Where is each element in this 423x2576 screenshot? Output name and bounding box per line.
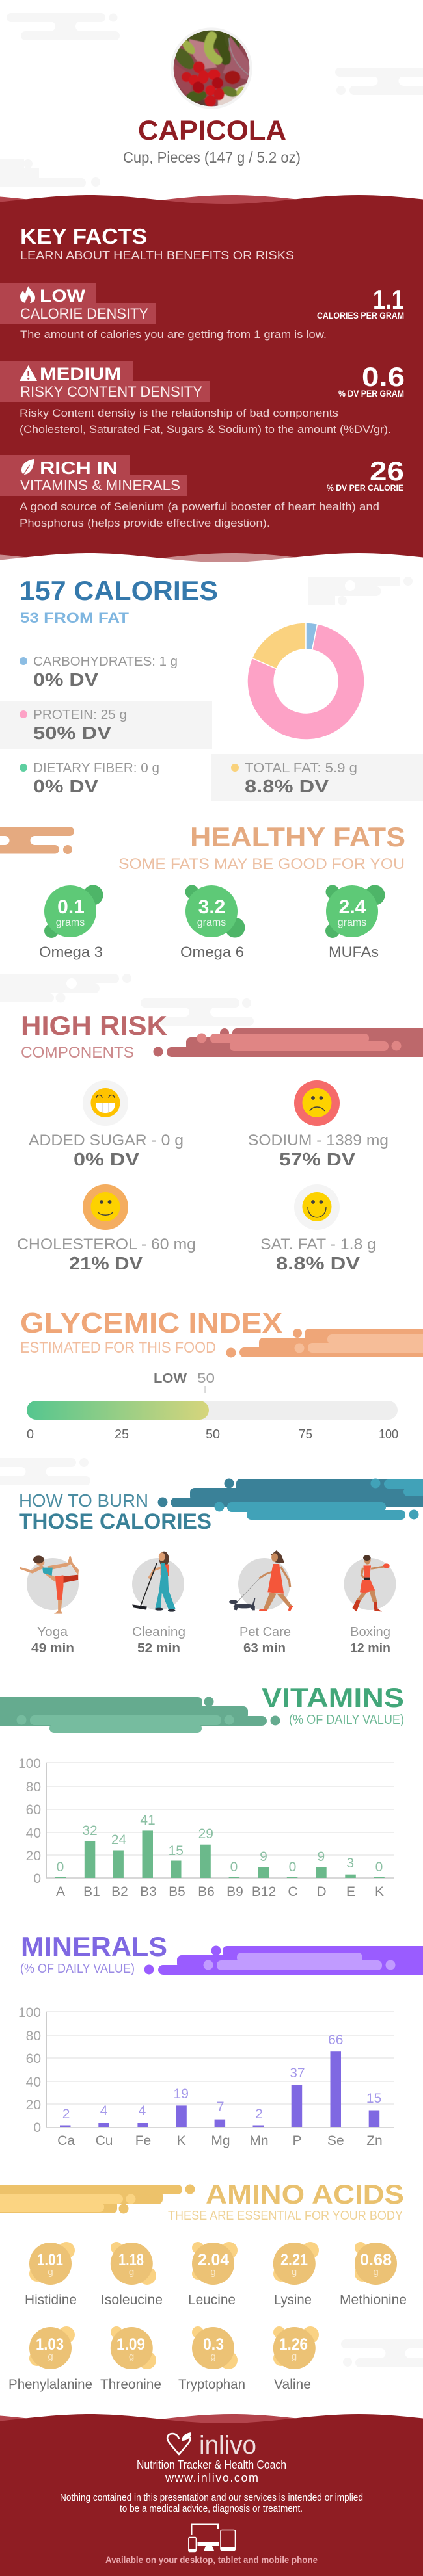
amino: histidine: Histidine xyxy=(25,2293,77,2308)
bar chart: minerals: Mg xyxy=(211,2133,230,2148)
amino: valine: Valine xyxy=(274,2377,311,2392)
activity: cleaning: 52 min xyxy=(137,1641,180,1656)
amino: valine: g xyxy=(292,2351,297,2362)
key facts subheading: LEARN ABOUT HEALTH BENEFITS OR RISKS xyxy=(20,249,294,262)
bar chart: minerals: 66 xyxy=(328,2033,343,2048)
amino: phenylalanine: 1.03 xyxy=(36,2335,64,2354)
icon: warning triangle xyxy=(20,365,37,381)
fat: omega 3: Omega 3 xyxy=(39,944,103,960)
disclaimer: Nothing contained in this presentation and our services is intended or implied xyxy=(60,2493,363,2503)
amino: lysine: Lysine xyxy=(274,2293,312,2308)
title: CAPICOLA xyxy=(138,115,286,146)
macro: carbohydrates: 0% DV xyxy=(33,670,98,690)
bar chart: minerals: Fe xyxy=(135,2133,151,2148)
amino: histidine xyxy=(25,2242,77,2308)
amino: tryptophan xyxy=(178,2326,245,2392)
fact: calorie density: The amount of calories you are getting from 1 gram is low. xyxy=(20,328,327,341)
risk: sodium: SODIUM - 1389 mg xyxy=(248,1132,389,1149)
amino: tryptophan: 0.3 xyxy=(203,2335,224,2354)
amino: leucine: 2.04 xyxy=(198,2251,229,2269)
macro: dietary fiber: 0% DV xyxy=(33,776,98,796)
amino: lysine: 2.21 xyxy=(280,2251,308,2269)
bar chart: vitamins: 20 xyxy=(26,1849,41,1864)
bar chart: minerals: Cu xyxy=(96,2133,113,2148)
activity: pet care: 63 min xyxy=(243,1641,286,1656)
icon: cleaning figure xyxy=(132,1552,175,1612)
fact: rich in vitamins and minerals: A good source of Selenium (a powerful booster of heart health) and xyxy=(20,501,379,513)
glycemic gauge xyxy=(27,1372,398,1442)
activity: cleaning: Cleaning xyxy=(132,1625,185,1639)
healthy fats heading: HEALTHY FATS xyxy=(190,822,405,852)
fact: risky content density: RISKY CONTENT DENSITY xyxy=(20,384,202,400)
bar chart: vitamins: 24 xyxy=(111,1832,126,1847)
fact: rich in vitamins and minerals xyxy=(0,455,404,529)
fat: MUFAs xyxy=(325,885,385,960)
bar chart: vitamins: E xyxy=(346,1884,355,1899)
high risk heading: HIGH RISK xyxy=(21,1010,167,1041)
decorative band: minerals xyxy=(144,1946,423,1975)
bar chart: minerals: P xyxy=(292,2133,302,2148)
bar chart: minerals xyxy=(18,2005,394,2148)
glycemic gauge: 50 xyxy=(206,1427,220,1442)
macro: total fat: 8.8% DV xyxy=(245,776,329,796)
bar chart: vitamins xyxy=(18,1756,394,1899)
activity: yoga xyxy=(20,1555,79,1656)
bar chart: vitamins: 40 xyxy=(26,1826,41,1841)
burn heading line one: HOW TO BURN xyxy=(19,1490,148,1511)
fact: calorie density: CALORIE DENSITY xyxy=(20,306,148,322)
icon: grinning face xyxy=(91,1088,120,1117)
bar chart: vitamins: 60 xyxy=(26,1802,41,1817)
icon: yoga figure xyxy=(20,1555,79,1614)
amino: threonine xyxy=(100,2326,161,2392)
bar chart: vitamins: 3 xyxy=(346,1856,354,1871)
risk: cholesterol: CHOLESTEROL - 60 mg xyxy=(17,1236,196,1253)
key facts heading: KEY FACTS xyxy=(20,224,147,248)
macro: dietary fiber xyxy=(20,761,159,796)
calories heading: 157 CALORIES xyxy=(20,575,218,606)
amino: tryptophan: g xyxy=(210,2351,216,2362)
amino: threonine: 1.09 xyxy=(116,2335,145,2354)
glycemic index heading: GLYCEMIC INDEX xyxy=(20,1307,282,1339)
macro: carbohydrates xyxy=(20,655,178,690)
bar chart: minerals: 7 xyxy=(217,2100,225,2114)
fact: calorie density xyxy=(0,283,404,341)
disclaimer xyxy=(60,2493,363,2514)
decorative band: healthy fats xyxy=(0,827,74,854)
macro: protein xyxy=(0,701,212,749)
amino: tryptophan: Tryptophan xyxy=(178,2377,245,2392)
fat: MUFAs: MUFAs xyxy=(329,944,379,960)
brand name: inlivo xyxy=(199,2431,256,2460)
bar chart: vitamins: B9 xyxy=(226,1884,243,1899)
icon: smiling face xyxy=(91,1192,120,1221)
macro: carbohydrates: CARBOHYDRATES: 1 g xyxy=(33,655,178,669)
fat: omega 6 xyxy=(180,885,245,960)
donut chart xyxy=(247,623,364,740)
burn heading line two: THOSE CALORIES xyxy=(19,1509,212,1534)
bar chart: vitamins: 100 xyxy=(18,1756,41,1771)
bar chart: vitamins: 0 xyxy=(289,1860,296,1875)
bar chart: minerals: 37 xyxy=(290,2066,305,2081)
panel: footer xyxy=(0,2414,423,2576)
fact: risky content density: MEDIUM xyxy=(40,364,121,384)
fat: omega 3 xyxy=(39,885,103,960)
macro: protein: PROTEIN: 25 g xyxy=(33,708,127,722)
amino: methionine: g xyxy=(373,2267,379,2278)
amino: methionine: 0.68 xyxy=(360,2251,392,2269)
amino acids heading: AMINO ACIDS xyxy=(206,2179,404,2209)
bar chart: vitamins: B6 xyxy=(198,1884,215,1899)
minerals subheading: (% OF DAILY VALUE) xyxy=(20,1962,135,1976)
bar chart: minerals: Zn xyxy=(366,2133,383,2148)
bar chart: vitamins: 0 xyxy=(230,1860,238,1875)
activity: yoga: 49 min xyxy=(31,1641,74,1656)
decorative band: high risk xyxy=(154,1028,423,1057)
fact: risky content density xyxy=(0,361,405,436)
decorative band: glycemic index xyxy=(226,1329,423,1357)
healthy fats subheading: SOME FATS MAY BE GOOD FOR YOU xyxy=(118,855,405,873)
macro: protein: 50% DV xyxy=(33,723,111,743)
icon: flame xyxy=(20,286,35,303)
amino: lysine xyxy=(273,2242,319,2308)
bar chart: vitamins: 0 xyxy=(57,1860,64,1875)
risk: cholesterol: 21% DV xyxy=(69,1253,143,1273)
bar chart: minerals: 20 xyxy=(26,2098,41,2113)
activity: boxing: 12 min xyxy=(350,1641,390,1656)
vitamins subheading: (% OF DAILY VALUE) xyxy=(289,1713,404,1727)
activity: pet care xyxy=(229,1550,293,1656)
fat: MUFAs: 2.4 xyxy=(339,896,366,918)
macro: total fat: TOTAL FAT: 5.9 g xyxy=(245,761,357,775)
icon: devices xyxy=(189,2525,236,2552)
glycemic gauge: LOW xyxy=(154,1372,187,1386)
bar chart: vitamins: 80 xyxy=(26,1780,41,1795)
disclaimer: to be a medical advice, diagnosis or treatment. xyxy=(120,2504,303,2514)
bar chart: minerals: 4 xyxy=(139,2103,146,2118)
fact: rich in vitamins and minerals: VITAMINS & MINERALS xyxy=(20,477,180,493)
fat: omega 3: 0.1 xyxy=(57,896,85,918)
amino: threonine: g xyxy=(129,2351,134,2362)
glycemic index subheading: ESTIMATED FOR THIS FOOD xyxy=(20,1339,216,1357)
icon: sad face xyxy=(302,1088,332,1117)
risk: cholesterol xyxy=(17,1184,196,1273)
bar chart: vitamins: B3 xyxy=(140,1884,157,1899)
bar chart: minerals: Mn xyxy=(249,2133,269,2148)
fat: omega 6: Omega 6 xyxy=(180,944,244,960)
icon: inlivo heart logo xyxy=(167,2432,191,2454)
bar chart: vitamins: 0 xyxy=(375,1860,383,1875)
risk: sodium: 57% DV xyxy=(279,1149,355,1169)
amino: phenylalanine xyxy=(8,2326,92,2392)
activity: cleaning xyxy=(132,1552,185,1656)
bar chart: vitamins: B12 xyxy=(252,1884,276,1899)
amino acids subheading: THESE ARE ESSENTIAL FOR YOUR BODY xyxy=(168,2209,403,2223)
bar chart: minerals: 2 xyxy=(62,2107,70,2122)
bar chart: minerals: 40 xyxy=(26,2075,41,2090)
risk: added sugar: ADDED SUGAR - 0 g xyxy=(29,1132,184,1149)
bar chart: vitamins: B2 xyxy=(111,1884,128,1899)
fat: omega 3: grams xyxy=(56,917,85,928)
amino: phenylalanine: g xyxy=(48,2351,53,2362)
bar chart: minerals: 100 xyxy=(18,2005,41,2020)
calories from fat: 53 FROM FAT xyxy=(20,610,130,626)
decorative band: vitamins xyxy=(0,1697,280,1733)
fat: omega 6: grams xyxy=(197,917,226,928)
fact: risky content density: (Cholesterol, Saturated Fat, Sugars & Sodium) to the amount (%DV/gr). xyxy=(20,423,391,436)
bar chart: minerals: 15 xyxy=(366,2091,381,2106)
bar chart: vitamins: 0 xyxy=(33,1871,41,1886)
fact: calorie density: LOW xyxy=(40,286,86,306)
minerals heading: MINERALS xyxy=(21,1931,167,1962)
bar chart: vitamins: C xyxy=(288,1884,298,1899)
amino: phenylalanine: Phenylalanine xyxy=(8,2377,92,2392)
vitamins heading: VITAMINS xyxy=(262,1682,404,1713)
icon: boxing figure xyxy=(352,1555,390,1611)
fact: calorie density: 1.1 xyxy=(373,284,404,315)
bar chart: vitamins: B5 xyxy=(169,1884,185,1899)
fact: risky content density: % DV PER GRAM xyxy=(338,389,404,398)
decorative band: burn calories xyxy=(157,1478,423,1520)
risk: added sugar xyxy=(29,1080,184,1169)
bar chart: vitamins: K xyxy=(375,1884,384,1899)
bar chart: vitamins: 41 xyxy=(140,1813,156,1828)
bar chart: minerals: 0 xyxy=(33,2120,41,2135)
bar chart: vitamins: 9 xyxy=(318,1849,325,1864)
availability note: Available on your desktop, tablet and mobile phone xyxy=(105,2555,318,2565)
glycemic gauge: 50 xyxy=(197,1372,215,1386)
fact: risky content density: Risky Content density is the relationship of bad components xyxy=(20,407,338,419)
bar chart: vitamins: 9 xyxy=(260,1849,267,1864)
fact: rich in vitamins and minerals: Phosphorus (helps provide effective digestion). xyxy=(20,517,270,529)
high risk subheading: COMPONENTS xyxy=(21,1044,134,1061)
website link: www.inlivo.com xyxy=(165,2471,258,2484)
bar chart: minerals: 19 xyxy=(174,2087,189,2101)
glycemic gauge: 0 xyxy=(27,1427,34,1442)
activity: pet care: Pet Care xyxy=(239,1625,291,1639)
glycemic gauge: 75 xyxy=(299,1427,312,1442)
amino: leucine xyxy=(188,2242,238,2308)
bar chart: minerals: 4 xyxy=(100,2103,108,2118)
bar chart: vitamins: B1 xyxy=(83,1884,100,1899)
activity: boxing: Boxing xyxy=(350,1625,390,1639)
risk: saturated fat: 8.8% DV xyxy=(276,1253,360,1273)
amino: isoleucine: 1.18 xyxy=(118,2251,144,2269)
glycemic gauge: 100 xyxy=(379,1427,398,1442)
amino: histidine: g xyxy=(48,2267,53,2278)
bar chart: vitamins: 15 xyxy=(169,1843,184,1858)
amino: methionine: Methionine xyxy=(340,2293,407,2308)
amino: valine: 1.26 xyxy=(279,2335,308,2354)
bar chart: vitamins: 32 xyxy=(82,1823,98,1838)
risk: sodium xyxy=(248,1080,389,1169)
amino: leucine: Leucine xyxy=(188,2293,236,2308)
fact: risky content density: 0.6 xyxy=(362,361,405,392)
decorative band: amino acids xyxy=(0,2184,195,2214)
amino: threonine: Threonine xyxy=(100,2377,161,2392)
risk: added sugar: 0% DV xyxy=(74,1149,139,1169)
amino: isoleucine: g xyxy=(129,2267,134,2278)
tagline: Nutrition Tracker & Health Coach xyxy=(137,2458,286,2471)
bar chart: vitamins: D xyxy=(316,1884,327,1899)
fact: calorie density: CALORIES PER GRAM xyxy=(317,311,404,320)
bar chart: vitamins: A xyxy=(56,1884,65,1899)
glycemic gauge: 25 xyxy=(115,1427,129,1442)
fact: rich in vitamins and minerals: % DV PER CALORIE xyxy=(327,483,403,493)
bar chart: minerals: 80 xyxy=(26,2029,41,2044)
bar chart: minerals: Se xyxy=(327,2133,344,2148)
macro: total fat xyxy=(212,754,423,801)
amino: isoleucine: Isoleucine xyxy=(101,2293,163,2308)
icon: dog walking figure xyxy=(229,1550,293,1611)
fat: MUFAs: grams xyxy=(338,917,366,928)
amino: leucine: g xyxy=(210,2267,216,2278)
amino: valine xyxy=(273,2326,319,2392)
fact: rich in vitamins and minerals: 26 xyxy=(370,456,404,486)
amino: methionine xyxy=(340,2242,407,2308)
macro: dietary fiber: DIETARY FIBER: 0 g xyxy=(33,761,159,775)
icon: happy face xyxy=(302,1192,332,1221)
food photo xyxy=(171,27,252,109)
risk: saturated fat xyxy=(260,1184,376,1273)
icon: leaf xyxy=(21,459,34,475)
bar chart: minerals: 2 xyxy=(255,2107,263,2122)
amino: isoleucine xyxy=(101,2242,163,2308)
bar chart: minerals: 60 xyxy=(26,2051,41,2066)
bar chart: vitamins: 29 xyxy=(198,1827,213,1841)
risk: saturated fat: SAT. FAT - 1.8 g xyxy=(260,1236,376,1253)
activity: yoga: Yoga xyxy=(37,1625,68,1639)
activity: boxing xyxy=(344,1555,396,1656)
fact: rich in vitamins and minerals: RICH IN xyxy=(40,458,118,478)
serving size: Cup, Pieces (147 g / 5.2 oz) xyxy=(123,149,301,166)
bar chart: minerals: K xyxy=(177,2133,186,2148)
amino: lysine: g xyxy=(292,2267,297,2278)
amino: histidine: 1.01 xyxy=(37,2251,63,2269)
fat: omega 6: 3.2 xyxy=(198,896,225,918)
bar chart: minerals: Ca xyxy=(57,2133,75,2148)
panel: key facts xyxy=(0,195,423,575)
